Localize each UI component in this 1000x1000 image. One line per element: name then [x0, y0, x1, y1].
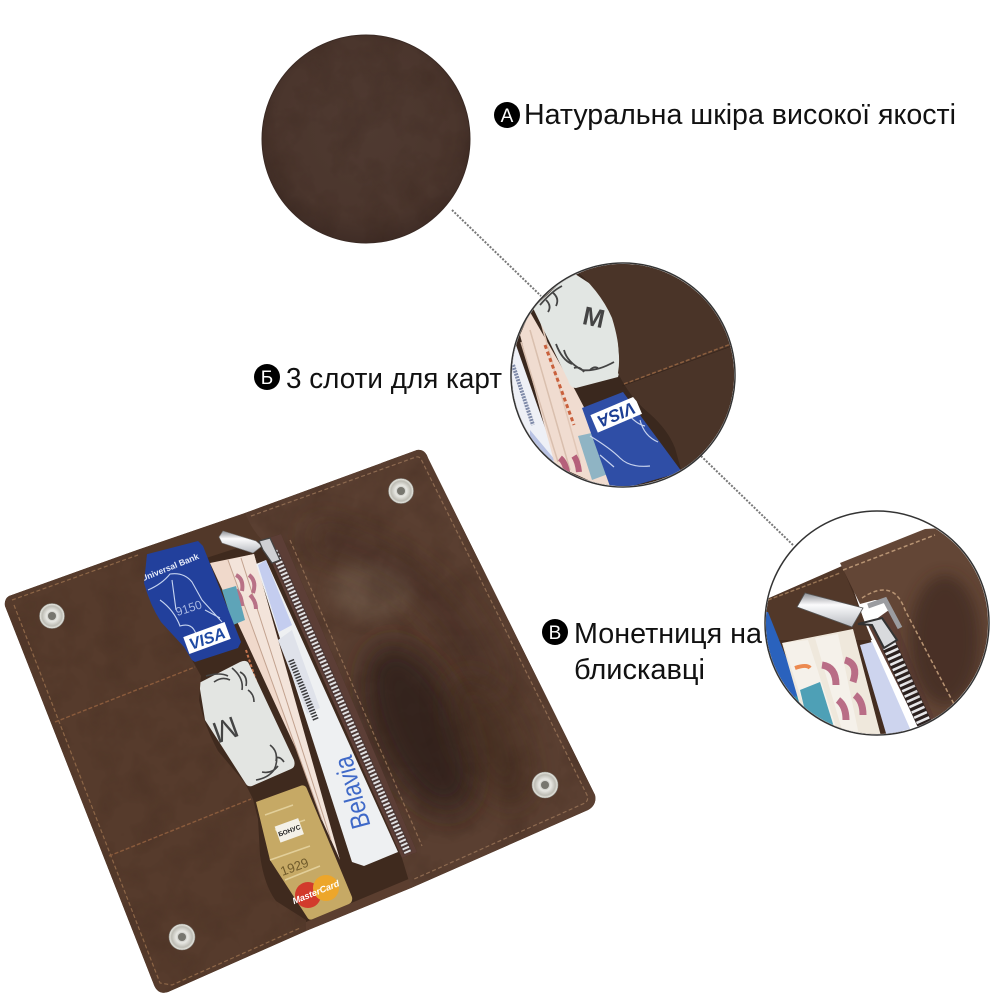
card M monogram: M — [580, 300, 608, 334]
wallet body — [0, 445, 600, 995]
right leather panel — [240, 445, 600, 895]
interior leather — [766, 568, 902, 734]
label text C: Монетниця на — [574, 618, 762, 650]
pocket seam 1 — [55, 667, 195, 722]
circle: card slots detail — [505, 260, 745, 492]
zipper pull — [797, 593, 900, 648]
flap stitch — [624, 344, 731, 384]
zipper — [219, 531, 417, 858]
silver card — [533, 272, 620, 388]
card digits: 1929 — [278, 855, 311, 879]
MasterCard logo: MasterCard — [291, 878, 341, 906]
banknotes — [210, 554, 340, 860]
right leather panel — [840, 528, 988, 718]
badge C — [542, 619, 568, 645]
badge B: Б — [261, 368, 273, 389]
VISA label: VISA — [187, 625, 228, 654]
badge A — [494, 102, 520, 128]
white card edge — [512, 345, 558, 465]
card number: 9150 — [174, 597, 204, 619]
panel stitching — [843, 535, 955, 706]
banknotes — [782, 629, 882, 740]
snap left top — [40, 604, 64, 628]
pocket seam 2 — [109, 799, 251, 856]
circle: leather swatch — [260, 33, 472, 245]
white Belavia card — [256, 560, 398, 866]
snap buttons — [40, 478, 558, 950]
badge C: В — [549, 623, 561, 644]
monogram: M — [208, 709, 243, 749]
Belavia logo: Belavia — [328, 752, 376, 832]
label text B: 3 слоти для карт — [286, 363, 502, 395]
blue card — [766, 612, 803, 706]
zipper pull — [219, 531, 280, 563]
badge B — [254, 364, 280, 390]
banknotes — [520, 312, 622, 490]
label A: natural leather — [494, 99, 956, 131]
zipper teeth — [889, 645, 925, 725]
lavender card — [860, 642, 910, 734]
leather flap — [580, 264, 734, 470]
flap stitching — [12, 555, 300, 985]
snap right top — [388, 478, 414, 504]
silver card — [199, 661, 295, 786]
snap left bottom — [169, 924, 195, 950]
open wallet — [0, 445, 600, 995]
VISA label: VISA — [594, 398, 638, 431]
circle: zipper detail — [760, 510, 1000, 745]
blue card — [582, 392, 682, 492]
label C: zipped coin pocket — [542, 618, 762, 686]
bonus tag: БОНУС — [278, 824, 302, 839]
left leather flap with pockets — [0, 540, 310, 995]
gold card — [256, 785, 352, 920]
label text A: Натуральна шкіра високої якості — [524, 99, 956, 131]
connector line: card slots to zipper — [701, 456, 794, 546]
snap right bottom — [532, 772, 558, 798]
blue card — [140, 541, 241, 662]
label text C: блискавці — [574, 654, 705, 686]
bank name: Universal Bank — [140, 551, 200, 583]
badge A: А — [501, 106, 514, 127]
connector line: swatch to card slots — [452, 210, 541, 296]
zipper tape — [868, 610, 947, 726]
right panel stitching — [251, 457, 588, 880]
label B: three card slots — [254, 363, 502, 395]
